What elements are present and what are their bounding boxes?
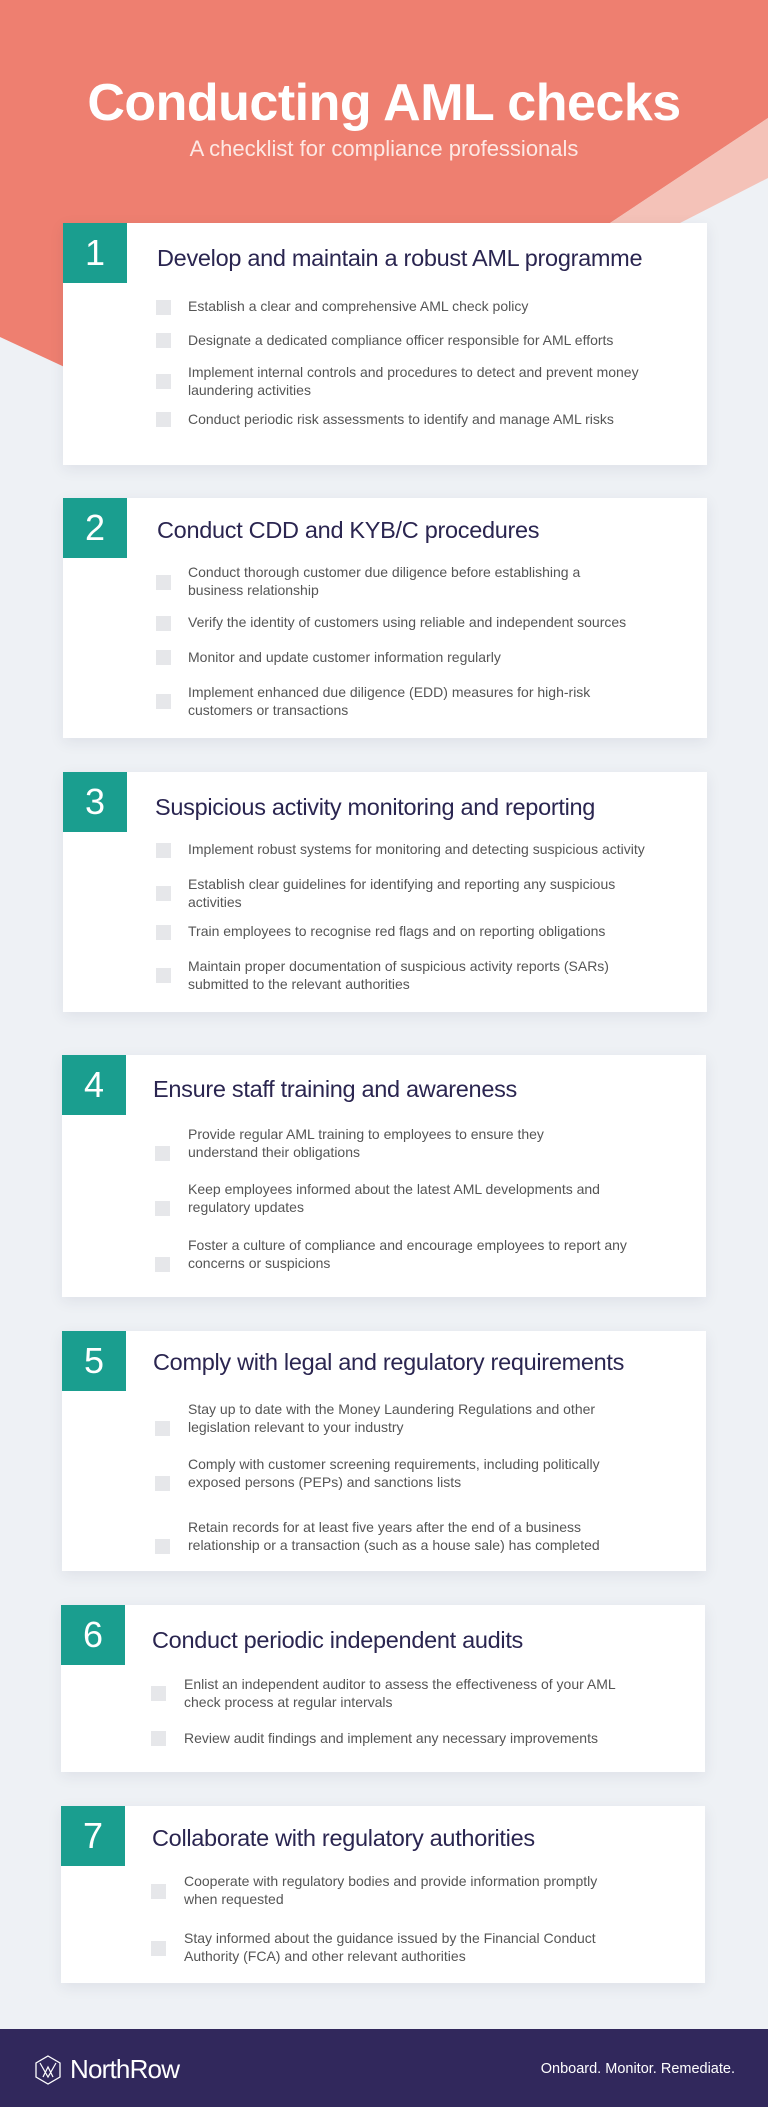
items 2: Verify the identity of customers using reliable and independent sources xyxy=(188,614,626,630)
number 4: 4 xyxy=(84,1064,104,1105)
number 4 xyxy=(62,1055,126,1115)
items 4 xyxy=(155,1126,627,1272)
heading 5: Comply with legal and regulatory requirements xyxy=(153,1349,624,1375)
items 3: Establish clear guidelines for identifying and reporting any suspicious xyxy=(188,876,615,892)
panel: step 6 xyxy=(61,1605,705,1772)
items 7: Stay informed about the guidance issued by the Financial Conduct xyxy=(184,1930,596,1946)
items 5: relationship or a transaction (such as a house sale) has completed xyxy=(188,1536,600,1552)
tagline: Onboard. Monitor. Remediate. xyxy=(541,2061,735,2077)
heading 1: Develop and maintain a robust AML programme xyxy=(157,245,642,271)
number 5 xyxy=(62,1331,126,1391)
items 3: Train employees to recognise red flags and on reporting obligations xyxy=(188,923,605,939)
items 5: legislation relevant to your industry xyxy=(188,1418,404,1434)
items 5: Stay up to date with the Money Laundering Regulations and other xyxy=(188,1401,595,1417)
items 1: Implement internal controls and procedures to detect and prevent money xyxy=(188,364,639,380)
items 2: business relationship xyxy=(188,582,319,598)
items 5: Comply with customer screening requirements, including politically xyxy=(188,1456,600,1472)
number 7: 7 xyxy=(83,1815,103,1856)
panel: step 1 xyxy=(63,223,707,465)
panel: step 7 xyxy=(61,1806,705,1983)
panel: step 3 xyxy=(63,772,707,1012)
items 7: Cooperate with regulatory bodies and provide information promptly xyxy=(184,1873,597,1889)
number 3 xyxy=(63,772,127,832)
panel: step 2 xyxy=(63,498,707,738)
items 3: Maintain proper documentation of suspicious activity reports (SARs) xyxy=(188,958,609,974)
heading 3: Suspicious activity monitoring and reporting xyxy=(155,794,595,820)
number 3: 3 xyxy=(85,781,105,822)
subtitle: A checklist for compliance professionals xyxy=(190,136,578,161)
items 3: activities xyxy=(188,894,242,910)
items 2: Implement enhanced due diligence (EDD) measures for high-risk xyxy=(188,684,590,700)
items 6: Review audit findings and implement any necessary improvements xyxy=(184,1730,598,1746)
items 3: Implement robust systems for monitoring and detecting suspicious activity xyxy=(188,841,645,857)
number 6 xyxy=(61,1605,125,1665)
items 5: Retain records for at least five years after the end of a business xyxy=(188,1519,581,1535)
items 2 xyxy=(156,564,626,718)
items 6 xyxy=(151,1676,616,1746)
items 1: Designate a dedicated compliance officer responsible for AML efforts xyxy=(188,332,613,348)
items 6: Enlist an independent auditor to assess the effectiveness of your AML xyxy=(184,1676,616,1692)
number 7 xyxy=(61,1806,125,1866)
logo: NorthRow: NorthRow xyxy=(70,2054,179,2084)
heading 4: Ensure staff training and awareness xyxy=(153,1076,517,1102)
items 2: customers or transactions xyxy=(188,702,348,718)
items 6: check process at regular intervals xyxy=(184,1694,393,1710)
number 2: 2 xyxy=(85,507,105,548)
items 7: when requested xyxy=(184,1890,284,1906)
heading 6: Conduct periodic independent audits xyxy=(152,1627,523,1653)
items 1 xyxy=(156,298,639,427)
heading 2: Conduct CDD and KYB/C procedures xyxy=(157,517,539,543)
items 1: Conduct periodic risk assessments to identify and manage AML risks xyxy=(188,411,614,427)
number 5: 5 xyxy=(84,1340,104,1381)
title: Conducting AML checks xyxy=(87,74,681,132)
footer xyxy=(0,2029,768,2107)
items 5 xyxy=(155,1401,600,1554)
heading 7: Collaborate with regulatory authorities xyxy=(152,1825,535,1851)
items 4: regulatory updates xyxy=(188,1198,304,1214)
number 2 xyxy=(63,498,127,558)
items 3: submitted to the relevant authorities xyxy=(188,976,410,992)
number 6: 6 xyxy=(83,1614,103,1655)
items 7: Authority (FCA) and other relevant authorities xyxy=(184,1948,466,1964)
items 4: concerns or suspicions xyxy=(188,1254,330,1270)
number 1 xyxy=(63,223,127,283)
items 7 xyxy=(151,1873,598,1964)
items 4: Provide regular AML training to employees to ensure they xyxy=(188,1126,544,1142)
background shapes xyxy=(0,0,768,366)
items 1: Establish a clear and comprehensive AML check policy xyxy=(188,298,528,314)
panel: step 5 xyxy=(62,1331,706,1571)
number 1: 1 xyxy=(85,232,105,273)
panel: step 4 xyxy=(62,1055,706,1297)
items 5: exposed persons (PEPs) and sanctions lists xyxy=(188,1474,461,1490)
items 4: understand their obligations xyxy=(188,1144,360,1160)
items 3 xyxy=(156,841,645,992)
items 4: Foster a culture of compliance and encourage employees to report any xyxy=(188,1237,627,1253)
items 2: Monitor and update customer information regularly xyxy=(188,649,501,665)
items 4: Keep employees informed about the latest AML developments and xyxy=(188,1181,600,1197)
items 2: Conduct thorough customer due diligence before establishing a xyxy=(188,564,580,580)
items 1: laundering activities xyxy=(188,382,311,398)
